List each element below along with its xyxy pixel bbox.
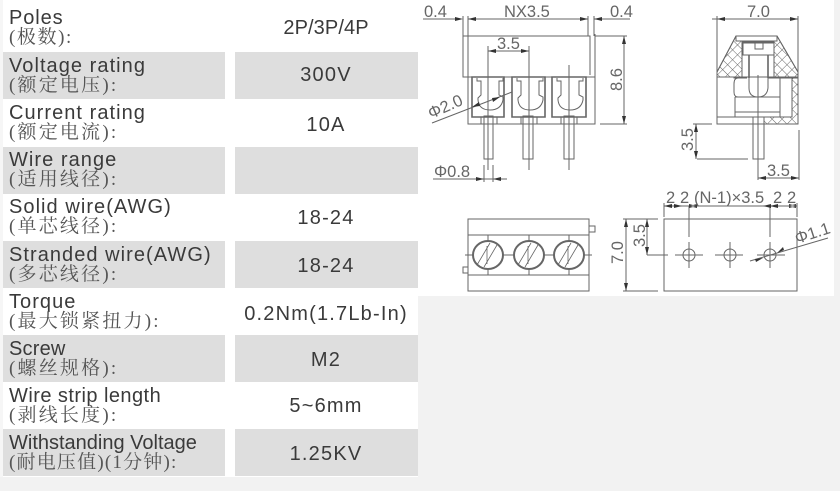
row: current rating: Current rating xyxy=(9,102,146,124)
row: voltage rating xyxy=(9,55,146,96)
drawing: bottom view xyxy=(609,189,833,291)
row: voltage rating: (额定电压): xyxy=(9,75,118,96)
row: screw xyxy=(9,338,118,379)
row: withstanding voltage: (耐电压值)(1分钟): xyxy=(9,452,178,473)
row: stranded wire: Stranded wire(AWG) xyxy=(9,244,212,266)
value: stranded wire: 18-24 xyxy=(297,255,355,277)
bottom view labels: Φ1.1 xyxy=(793,220,833,248)
side view labels: 7.0 xyxy=(747,3,770,21)
value: strip length: 5~6mm xyxy=(289,395,363,417)
dimension labels: 0.4 xyxy=(424,3,447,21)
row: wire strip length: (剥线长度): xyxy=(9,405,118,426)
bottom view labels: 3.5 xyxy=(631,224,649,247)
value: voltage: 300V xyxy=(300,64,352,86)
row: poles: Poles xyxy=(9,7,64,29)
row: screw: Screw xyxy=(9,338,66,360)
value: poles: 2P/3P/4P xyxy=(283,17,369,39)
side view labels: 3.5 xyxy=(767,162,790,180)
row shading: withstanding value xyxy=(235,429,418,476)
dimension labels: Φ2.0 xyxy=(425,92,466,123)
drawing: top view xyxy=(463,219,595,291)
row: wire strip length xyxy=(9,385,161,426)
bottom view labels: 2 xyxy=(787,189,796,207)
dimension labels: 3.5 xyxy=(497,35,520,53)
bottom view labels: 2 xyxy=(666,189,675,207)
row: wire range: (适用线径): xyxy=(9,169,118,190)
bottom view labels: 2 xyxy=(680,189,689,207)
row: solid wire: Solid wire(AWG) xyxy=(9,196,172,218)
dimension labels: NX3.5 xyxy=(504,3,550,21)
background strip: right edge xyxy=(834,0,840,296)
row: stranded wire xyxy=(9,244,212,285)
row: screw: (螺丝规格): xyxy=(9,358,118,379)
value: withstanding: 1.25KV xyxy=(290,443,362,465)
row: stranded wire: (多芯线径): xyxy=(9,264,118,285)
value: screw: M2 xyxy=(311,349,341,371)
dimension labels: 8.6 xyxy=(608,68,626,91)
row: wire strip length: Wire strip length xyxy=(9,385,161,407)
row: solid wire: (单芯线径): xyxy=(9,216,118,237)
bottom view labels: 7.0 xyxy=(609,241,627,264)
row shading: screw label xyxy=(3,335,225,382)
bottom view labels xyxy=(609,189,833,264)
hatched body xyxy=(717,36,798,78)
side view labels: 3.5 xyxy=(679,128,697,151)
row: torque: (最大锁紧扭力): xyxy=(9,311,161,332)
row: withstanding voltage xyxy=(9,432,197,473)
row: torque xyxy=(9,291,161,332)
value: current: 10A xyxy=(306,114,346,136)
row: current rating: (额定电流): xyxy=(9,122,118,143)
row: voltage rating: Voltage rating xyxy=(9,55,146,77)
row shading: withstanding label xyxy=(3,429,225,476)
background strip: bottom xyxy=(0,477,418,491)
side view labels xyxy=(679,3,790,180)
row shading: stranded value xyxy=(235,241,418,288)
row shading: stranded label xyxy=(3,241,225,288)
row shading: voltage label xyxy=(3,52,225,99)
bottom view labels: 2 xyxy=(773,189,782,207)
row shading: screw value xyxy=(235,335,418,382)
row: solid wire xyxy=(9,196,172,237)
row: wire range xyxy=(9,149,118,190)
background strip: left edge xyxy=(0,0,3,477)
row shading: wire range label xyxy=(3,147,225,194)
drawing: front view xyxy=(423,3,633,182)
background panel: lower right xyxy=(418,296,840,491)
dimension labels: Φ0.8 xyxy=(434,163,470,181)
row: wire range: Wire range xyxy=(9,149,117,171)
value: torque: 0.2Nm(1.7Lb-In) xyxy=(244,303,408,325)
bottom view labels: (N-1)×3.5 xyxy=(694,189,764,207)
row: poles: (极数): xyxy=(9,27,73,48)
row: torque: Torque xyxy=(9,291,76,313)
row: withstanding voltage: Withstanding Voltage xyxy=(9,432,197,454)
row shading: voltage value xyxy=(235,52,418,99)
value: solid wire: 18-24 xyxy=(297,207,355,229)
dimension labels: 0.4 xyxy=(610,3,633,21)
row: current rating xyxy=(9,102,146,143)
drawing: side view xyxy=(679,3,799,180)
row shading: wire range value xyxy=(235,147,418,194)
dimension labels xyxy=(424,3,633,181)
row: poles xyxy=(9,7,73,48)
